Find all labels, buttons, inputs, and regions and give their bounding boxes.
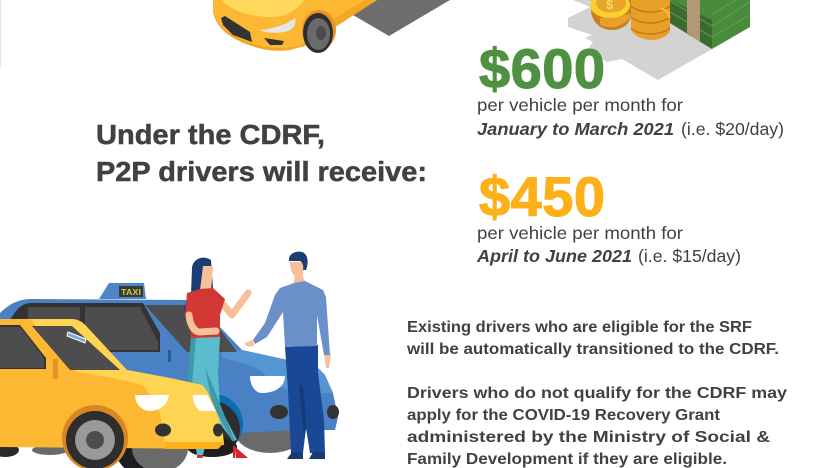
text block: eligibility notes: will be automatically transitioned to the CDRF. (406, 341, 779, 358)
text block: eligibility notes: Existing drivers who are eligible for the SRF (407, 319, 752, 336)
heading: under the CDRF: Under the CDRF, (96, 119, 325, 150)
illustration: blue taxi: TAXI (121, 288, 141, 297)
illustration: yellow taxi (0, 319, 224, 468)
illustration: money stack with coins (568, 0, 750, 80)
heading: under the CDRF: P2P drivers will receive: (96, 156, 427, 187)
amount: $600 block (477, 37, 784, 139)
amount: $450 block: (i.e. $15/day) (638, 246, 741, 266)
amount: $600 block: $600 (479, 37, 605, 100)
text block: eligibility notes: Family Development if they are eligible. (407, 451, 727, 468)
text block: eligibility notes (406, 319, 787, 468)
illustration: blue taxi (0, 283, 339, 457)
text block: eligibility notes: apply for the COVID-19 Recovery Grant (407, 407, 720, 424)
amount: $450 block: April to June 2021 (476, 246, 632, 266)
amount: $600 block: (i.e. $20/day) (681, 119, 784, 139)
heading: under the CDRF (96, 119, 427, 187)
illustration: man (245, 252, 331, 459)
amount: $600 block: January to March 2021 (477, 119, 674, 139)
amount: $450 block: per vehicle per month for (477, 223, 683, 243)
text block: eligibility notes: Drivers who do not qualify for the CDRF may (407, 385, 787, 402)
text block: eligibility notes: administered by the Ministry of Social & (407, 429, 770, 446)
amount: $600 block: per vehicle per month for (477, 95, 683, 115)
amount: $450 block: $450 (479, 165, 605, 228)
amount: $450 block (476, 165, 741, 266)
illustration: woman (183, 258, 248, 458)
illustration: top yellow taxi on road (213, 0, 450, 53)
